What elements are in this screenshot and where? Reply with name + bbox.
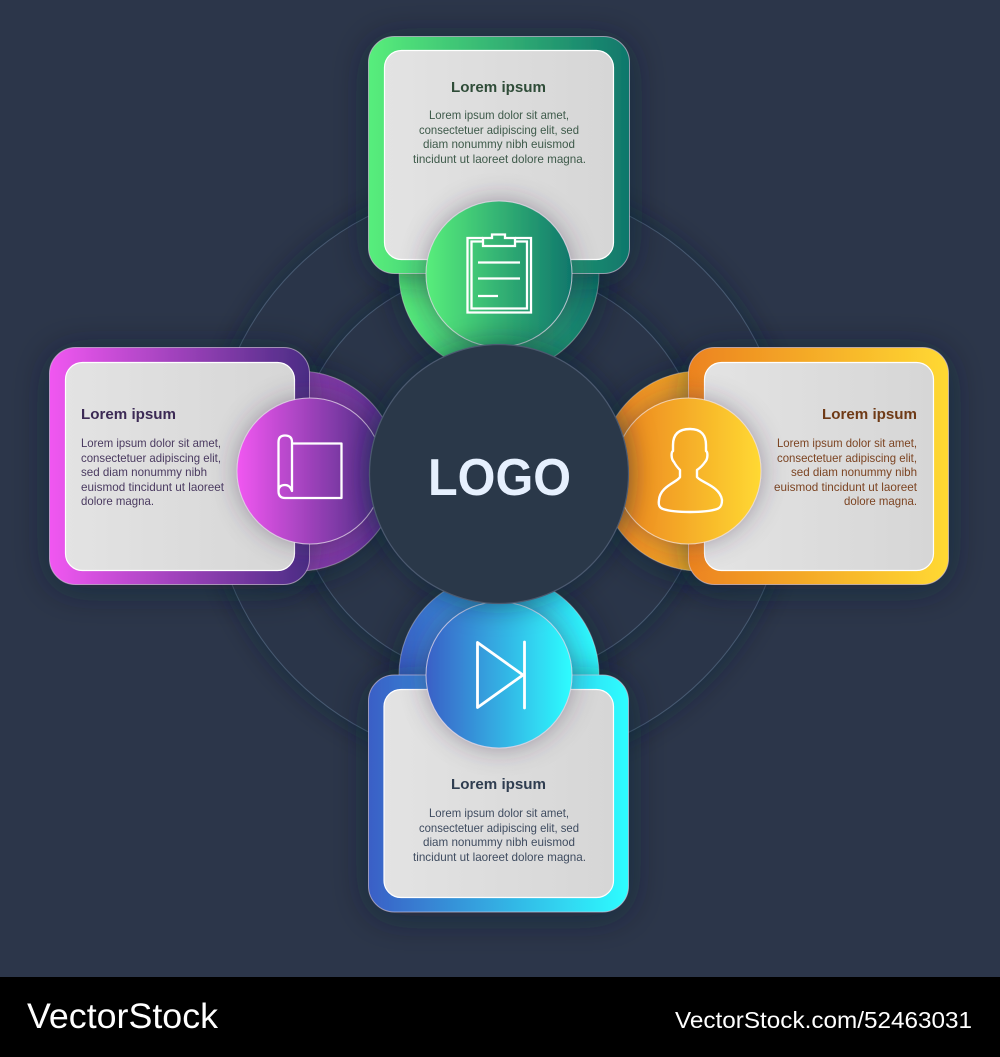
orange card inner xyxy=(704,362,934,570)
orange card frame xyxy=(688,348,948,584)
orange body text: consectetuer adipiscing elit, xyxy=(777,451,917,465)
panel: purple left xyxy=(50,348,398,584)
icon: clipboard xyxy=(468,234,531,312)
green body text: diam nonummy nibh euismod xyxy=(423,137,575,151)
blue body text: tincidunt ut laoreet dolore magna. xyxy=(413,850,586,864)
green body text: Lorem ipsum dolor sit amet, xyxy=(429,108,569,122)
blue body text: diam nonummy nibh euismod xyxy=(423,835,575,849)
blue body text xyxy=(413,806,586,864)
purple body text: sed diam nonummy nibh xyxy=(81,465,207,479)
icon: scroll xyxy=(278,436,342,498)
footer url: VectorStock.com/52463031 xyxy=(675,1007,972,1033)
blue body text: Lorem ipsum dolor sit amet, xyxy=(429,806,569,820)
green body text: consectetuer adipiscing elit, sed xyxy=(419,123,579,137)
orange body text xyxy=(774,436,918,508)
purple body text: consectetuer adipiscing elit, xyxy=(81,451,221,465)
blue body text: consectetuer adipiscing elit, sed xyxy=(419,821,579,835)
blue back circle xyxy=(399,575,599,775)
blue card inner xyxy=(384,690,614,898)
green card inner xyxy=(384,50,614,260)
logo text: LOGO xyxy=(428,449,571,507)
orange body text: Lorem ipsum dolor sit amet, xyxy=(777,436,917,450)
icon: person xyxy=(659,429,722,512)
orange back circle xyxy=(600,371,800,571)
orange icon circle xyxy=(615,398,761,544)
orange body text: dolore magna. xyxy=(844,494,917,508)
green card frame xyxy=(368,36,630,274)
purple body text xyxy=(81,436,225,508)
footer brand: VectorStock xyxy=(27,997,219,1036)
green heading: Lorem ipsum xyxy=(451,79,546,96)
purple icon circle xyxy=(237,398,383,544)
purple body text: euismod tincidunt ut laoreet xyxy=(81,480,225,494)
green body text xyxy=(413,108,586,166)
icon: skip next xyxy=(478,642,524,708)
panel: orange right xyxy=(600,348,948,584)
green icon circle xyxy=(426,201,572,347)
green back circle xyxy=(399,173,599,373)
purple card frame xyxy=(50,348,310,584)
footer bar xyxy=(0,977,1000,1057)
orange body text: sed diam nonummy nibh xyxy=(791,465,917,479)
purple body text: Lorem ipsum dolor sit amet, xyxy=(81,436,221,450)
green body text: tincidunt ut laoreet dolore magna. xyxy=(413,152,586,166)
center logo circle xyxy=(370,344,628,604)
orange body text: euismod tincidunt ut laoreet xyxy=(774,480,918,494)
purple card inner xyxy=(66,362,294,570)
panel: green top xyxy=(368,36,630,373)
orange heading: Lorem ipsum xyxy=(822,406,917,423)
purple heading: Lorem ipsum xyxy=(81,406,176,423)
purple body text: dolore magna. xyxy=(81,494,154,508)
blue icon circle xyxy=(426,602,572,748)
panel: blue bottom xyxy=(368,575,628,912)
blue card frame xyxy=(368,675,628,912)
blue heading: Lorem ipsum xyxy=(451,776,546,793)
concentric rings xyxy=(210,185,788,763)
purple back circle xyxy=(198,371,398,571)
